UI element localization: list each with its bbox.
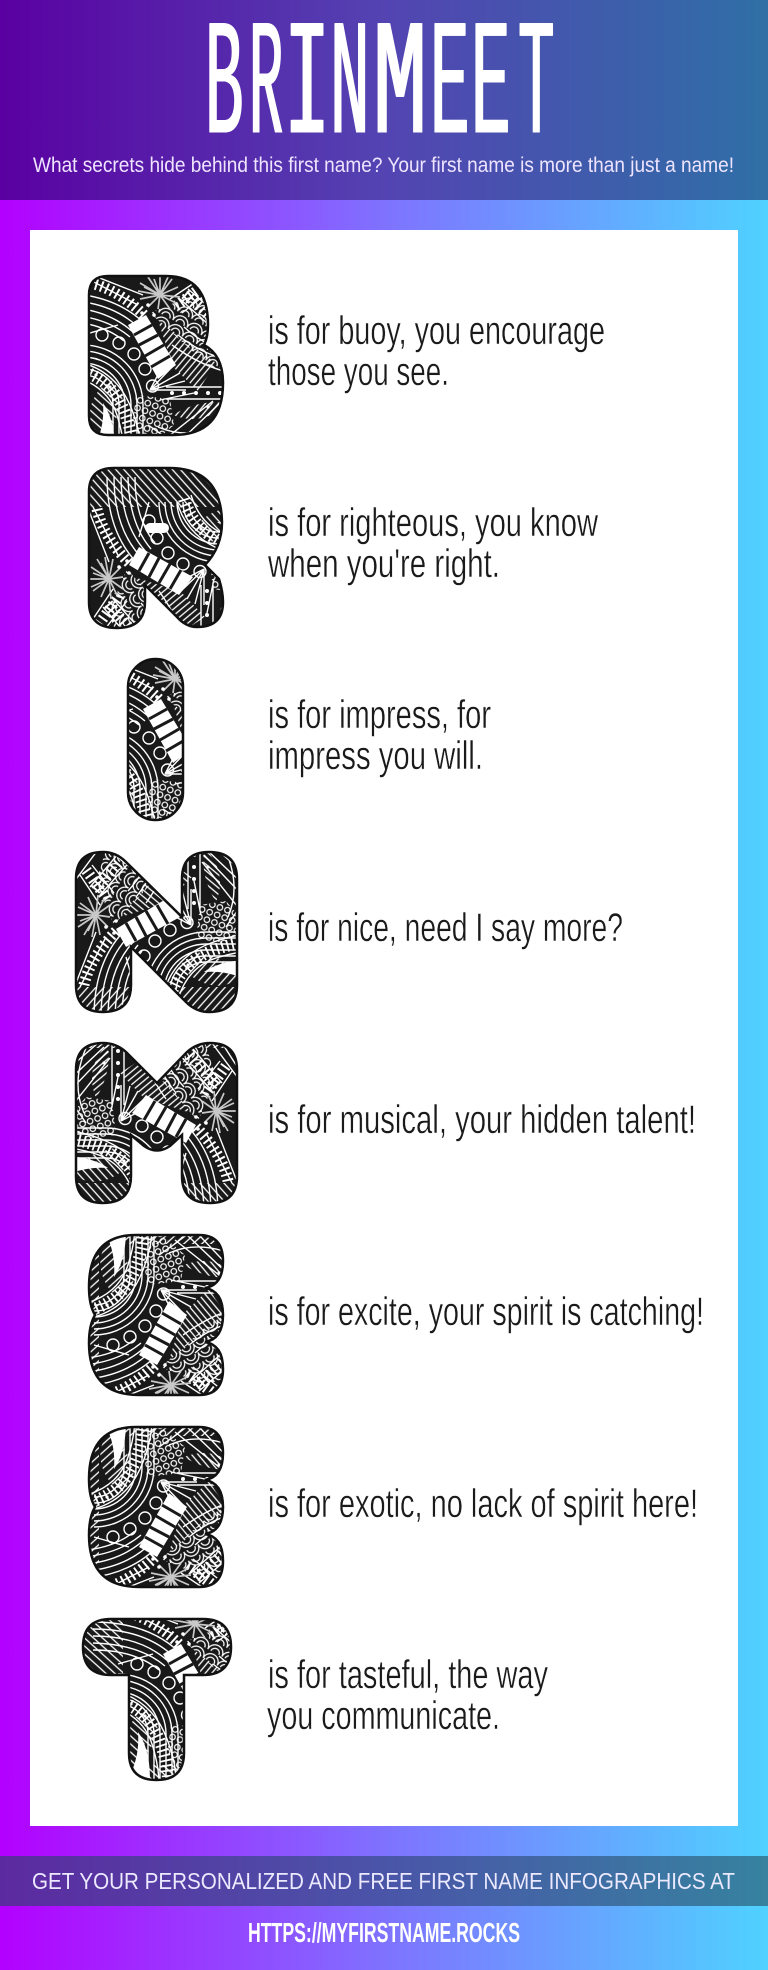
icon: patterned letter T	[82, 1618, 232, 1782]
title: M	[373, 0, 427, 184]
icon: patterned letter N	[74, 850, 238, 1014]
row: second letter E	[88, 1426, 696, 1588]
icon: patterned letter E	[88, 1234, 224, 1396]
panel: white card	[30, 230, 738, 1826]
title: R	[249, 0, 283, 184]
text: R line: when you're right.	[267, 542, 500, 586]
header band	[0, 0, 768, 200]
title: N	[330, 0, 370, 184]
title	[205, 0, 554, 184]
text: B line: is for buoy, you encourage	[268, 309, 605, 353]
text: I line	[268, 693, 491, 778]
text: R line	[267, 501, 598, 586]
row: letter E	[88, 1234, 702, 1396]
text: R line: is for righteous, you know	[268, 501, 598, 545]
footer band	[0, 1856, 768, 1906]
row: letter N	[74, 850, 622, 1014]
footer url: HTTPS://MYFIRSTNAME.ROCKS	[248, 1917, 520, 1948]
icon: patterned letter M	[74, 1042, 238, 1204]
title: T	[518, 0, 554, 184]
row: letter R	[88, 466, 598, 630]
text: B line: those you see.	[268, 350, 449, 394]
title: E	[471, 0, 511, 184]
title: E	[430, 0, 470, 184]
icon: patterned letter B	[88, 274, 224, 436]
row: letter T	[82, 1618, 548, 1782]
text: B line	[268, 309, 605, 394]
text: I line: is for impress, for	[268, 693, 491, 737]
text: T line: you communicate.	[267, 1694, 500, 1738]
row: letter B	[88, 274, 604, 436]
text: T line: is for tasteful, the way	[268, 1653, 548, 1697]
row: letter I	[126, 658, 491, 822]
text: I line: impress you will.	[268, 734, 483, 778]
icon: patterned letter I	[126, 658, 184, 822]
icon: patterned letter E	[88, 1426, 224, 1588]
icon: patterned letter R	[88, 466, 224, 630]
row: letter M	[74, 1042, 694, 1204]
title: I	[284, 0, 330, 184]
title: B	[205, 0, 243, 184]
text: T line	[267, 1653, 548, 1738]
text: N line: is for nice, need I say more?	[268, 906, 623, 950]
